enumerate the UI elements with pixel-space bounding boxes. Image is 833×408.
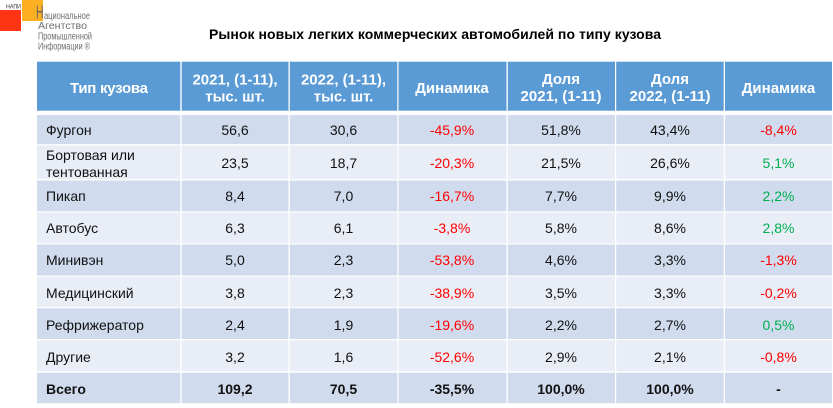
row: Минивэн: -1,3% [760,252,797,268]
row: Пикап [37,180,832,211]
row: Автобус: 8,6% [654,220,686,236]
row: Медицинский: -38,9% [430,285,474,301]
row: Автобус: -3,8% [434,220,470,236]
row: Рефрижератор: 2,7% [654,317,686,333]
row: Всего: Всего [46,381,86,397]
row: Минивэн: 3,3% [654,252,686,268]
row: Всего: 109,2 [217,381,253,397]
logo: NAPI: НАПИ [6,4,21,10]
logo: NAPI: Информации ® [38,40,90,52]
row: Пикап: 7,0 [334,188,353,204]
row: Другие: 1,6 [334,349,353,365]
row: Минивэн: Минивэн [46,252,103,268]
title: Рынок новых легких коммерческих автомобилей по типу кузова [209,26,661,42]
row: Фургон: -45,9% [430,122,474,138]
row: Рефрижератор: 0,5% [763,317,794,333]
row: Бортовая или тентованная [37,146,832,180]
row: Пикап: 8,4 [225,188,245,204]
table header: тыс. шт. [314,88,373,106]
row: Пикап: 2,2% [763,188,794,204]
row: Рефрижератор: Рефрижератор [46,317,144,333]
logo: NAPI [0,0,92,52]
row: Бортовая или тентованная: Бортовая или [46,147,135,163]
table header: 2022, (1-11), [301,72,386,88]
row: Рефрижератор [37,308,832,339]
row: Бортовая или тентованная: 21,5% [541,155,581,171]
table header [37,62,832,111]
row: Другие: 2,1% [654,349,686,365]
row: Всего: 100,0% [537,381,585,397]
row: Другие: -52,6% [430,349,474,365]
logo: NAPI: Агентство [38,21,87,32]
row: Минивэн [37,244,832,276]
logo: NAPI: ациональное [44,11,90,22]
logo: NAPI: Промышленной [38,32,92,42]
row: Пикап: -16,7% [430,188,474,204]
row: Всего: - [776,381,781,397]
row: Пикап: 9,9% [654,188,686,204]
row: Фургон: 51,8% [541,122,581,138]
row: Бортовая или тентованная: 23,5 [221,155,249,171]
row: Фургон: 56,6 [221,122,249,138]
table header: Динамика [415,80,489,97]
logo: NAPI: Н [36,2,44,22]
row: Медицинский: 3,3% [654,285,686,301]
row: Другие: -0,8% [760,349,797,365]
row: Всего [37,373,832,403]
row: Другие: 2,9% [545,349,577,365]
row: Рефрижератор: 1,9 [334,317,353,333]
table header: Доля [542,71,580,88]
row: Рефрижератор: 2,4 [225,317,245,333]
row: Фургон [37,115,832,144]
row: Бортовая или тентованная: 18,7 [330,155,357,171]
row: Рефрижератор: -19,6% [430,317,474,333]
table header: 2021, (1-11) [521,88,601,105]
row: Фургон: Фургон [46,122,92,138]
row: Автобус [37,212,832,243]
row: Минивэн: 4,6% [545,252,577,268]
table header: 2022, (1-11) [630,88,710,105]
table header: Тип кузова [70,80,149,97]
row: Фургон: -8,4% [760,122,797,138]
row: Другие [37,340,832,371]
row: Пикап: Пикап [46,188,86,204]
table header: тыс. шт. [205,88,265,106]
row: Бортовая или тентованная: 5,1% [763,155,794,171]
row: Рефрижератор: 2,2% [545,317,577,333]
row: Фургон: 30,6 [330,122,357,138]
row: Другие: Другие [46,349,91,365]
row: Бортовая или тентованная: -20,3% [430,155,474,171]
row: Автобус: 5,8% [545,220,577,236]
row: Минивэн: 2,3 [334,252,353,268]
row: Всего: 70,5 [330,381,357,397]
row: Медицинский: 3,5% [545,285,577,301]
row: Медицинский [37,277,832,307]
row: Другие: 3,2 [225,349,245,365]
row: Медицинский: 3,8 [225,285,245,301]
row: Автобус: 6,3 [225,220,245,236]
row: Медицинский: -0,2% [760,285,797,301]
row: Минивэн: 5,0 [225,252,245,268]
row: Автобус: 6,1 [334,220,353,236]
row: Автобус: 2,8% [763,220,794,236]
row: Пикап: 7,7% [545,188,577,204]
row: Всего: -35,5% [430,381,475,397]
row: Фургон: 43,4% [650,122,690,138]
row: Минивэн: -53,8% [430,252,474,268]
row: Всего: 100,0% [646,381,694,397]
row: Бортовая или тентованная: тентованная [46,164,128,180]
row: Медицинский: 2,3 [334,285,353,301]
table header: 2021, (1-11), [192,72,278,88]
table header: Динамика [742,80,816,97]
row: Бортовая или тентованная: 26,6% [650,155,690,171]
row: Автобус: Автобус [46,220,98,236]
table header: Доля [651,71,689,88]
row: Медицинский: Медицинский [46,285,134,301]
